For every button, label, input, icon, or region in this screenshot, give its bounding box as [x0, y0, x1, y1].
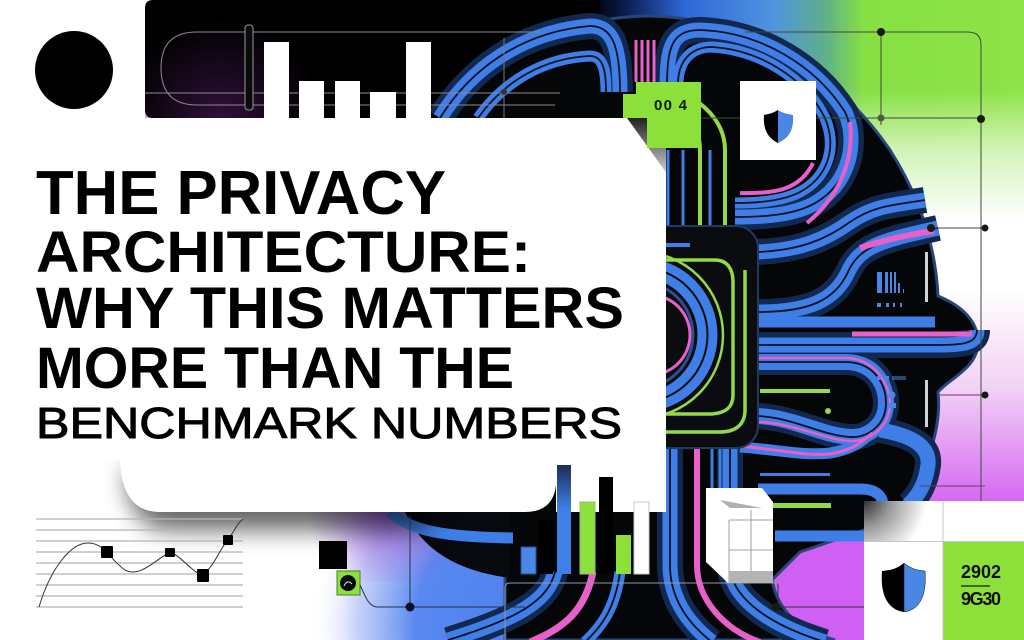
white title card [0, 118, 666, 512]
chamfer shade [627, 118, 666, 172]
title [36, 159, 624, 448]
brain circuit tubes [390, 26, 977, 640]
white bars in banner [264, 42, 431, 118]
dark blob under the card [405, 512, 510, 578]
vertical connectors under label [660, 98, 725, 500]
title: WHY THIS MATTERS [36, 276, 624, 341]
icon: shield in white box [740, 81, 816, 160]
title: ARCHITECTURE: [36, 220, 531, 285]
mini data bars inside brain [877, 252, 928, 427]
panel numbers: 2902 [961, 562, 1001, 582]
tube contour lines [440, 26, 977, 640]
title: THE PRIVACY [36, 159, 446, 228]
brain silhouette [420, 16, 978, 640]
pink tubes [530, 40, 972, 640]
title: MORE THAN THE [36, 336, 514, 401]
bottom bar chart [521, 465, 649, 574]
black circle [35, 31, 113, 109]
bottom right panel [864, 501, 1024, 640]
small accent lines [760, 389, 831, 508]
black square [319, 541, 347, 569]
green node icon [337, 571, 360, 595]
blue tubes: main [440, 26, 977, 640]
gradient background: top band and colour washes [290, 0, 1024, 640]
panel numbers: 9G30 [961, 589, 1001, 609]
green label 004: 00 4 [654, 97, 688, 114]
panel numbers [961, 562, 1001, 609]
green label 004 [623, 82, 701, 148]
dark top banner [145, 0, 600, 118]
title: BENCHMARK NUMBERS [36, 399, 622, 448]
3D white cube [706, 488, 773, 583]
icon: shield [882, 563, 925, 612]
blue tubes: dark underlay [440, 26, 977, 640]
chart lines and trend [36, 519, 243, 607]
connector circuit [360, 516, 780, 640]
central chip [557, 226, 758, 448]
thin grid lines and nodes [145, 25, 988, 611]
card shadow [125, 470, 430, 530]
